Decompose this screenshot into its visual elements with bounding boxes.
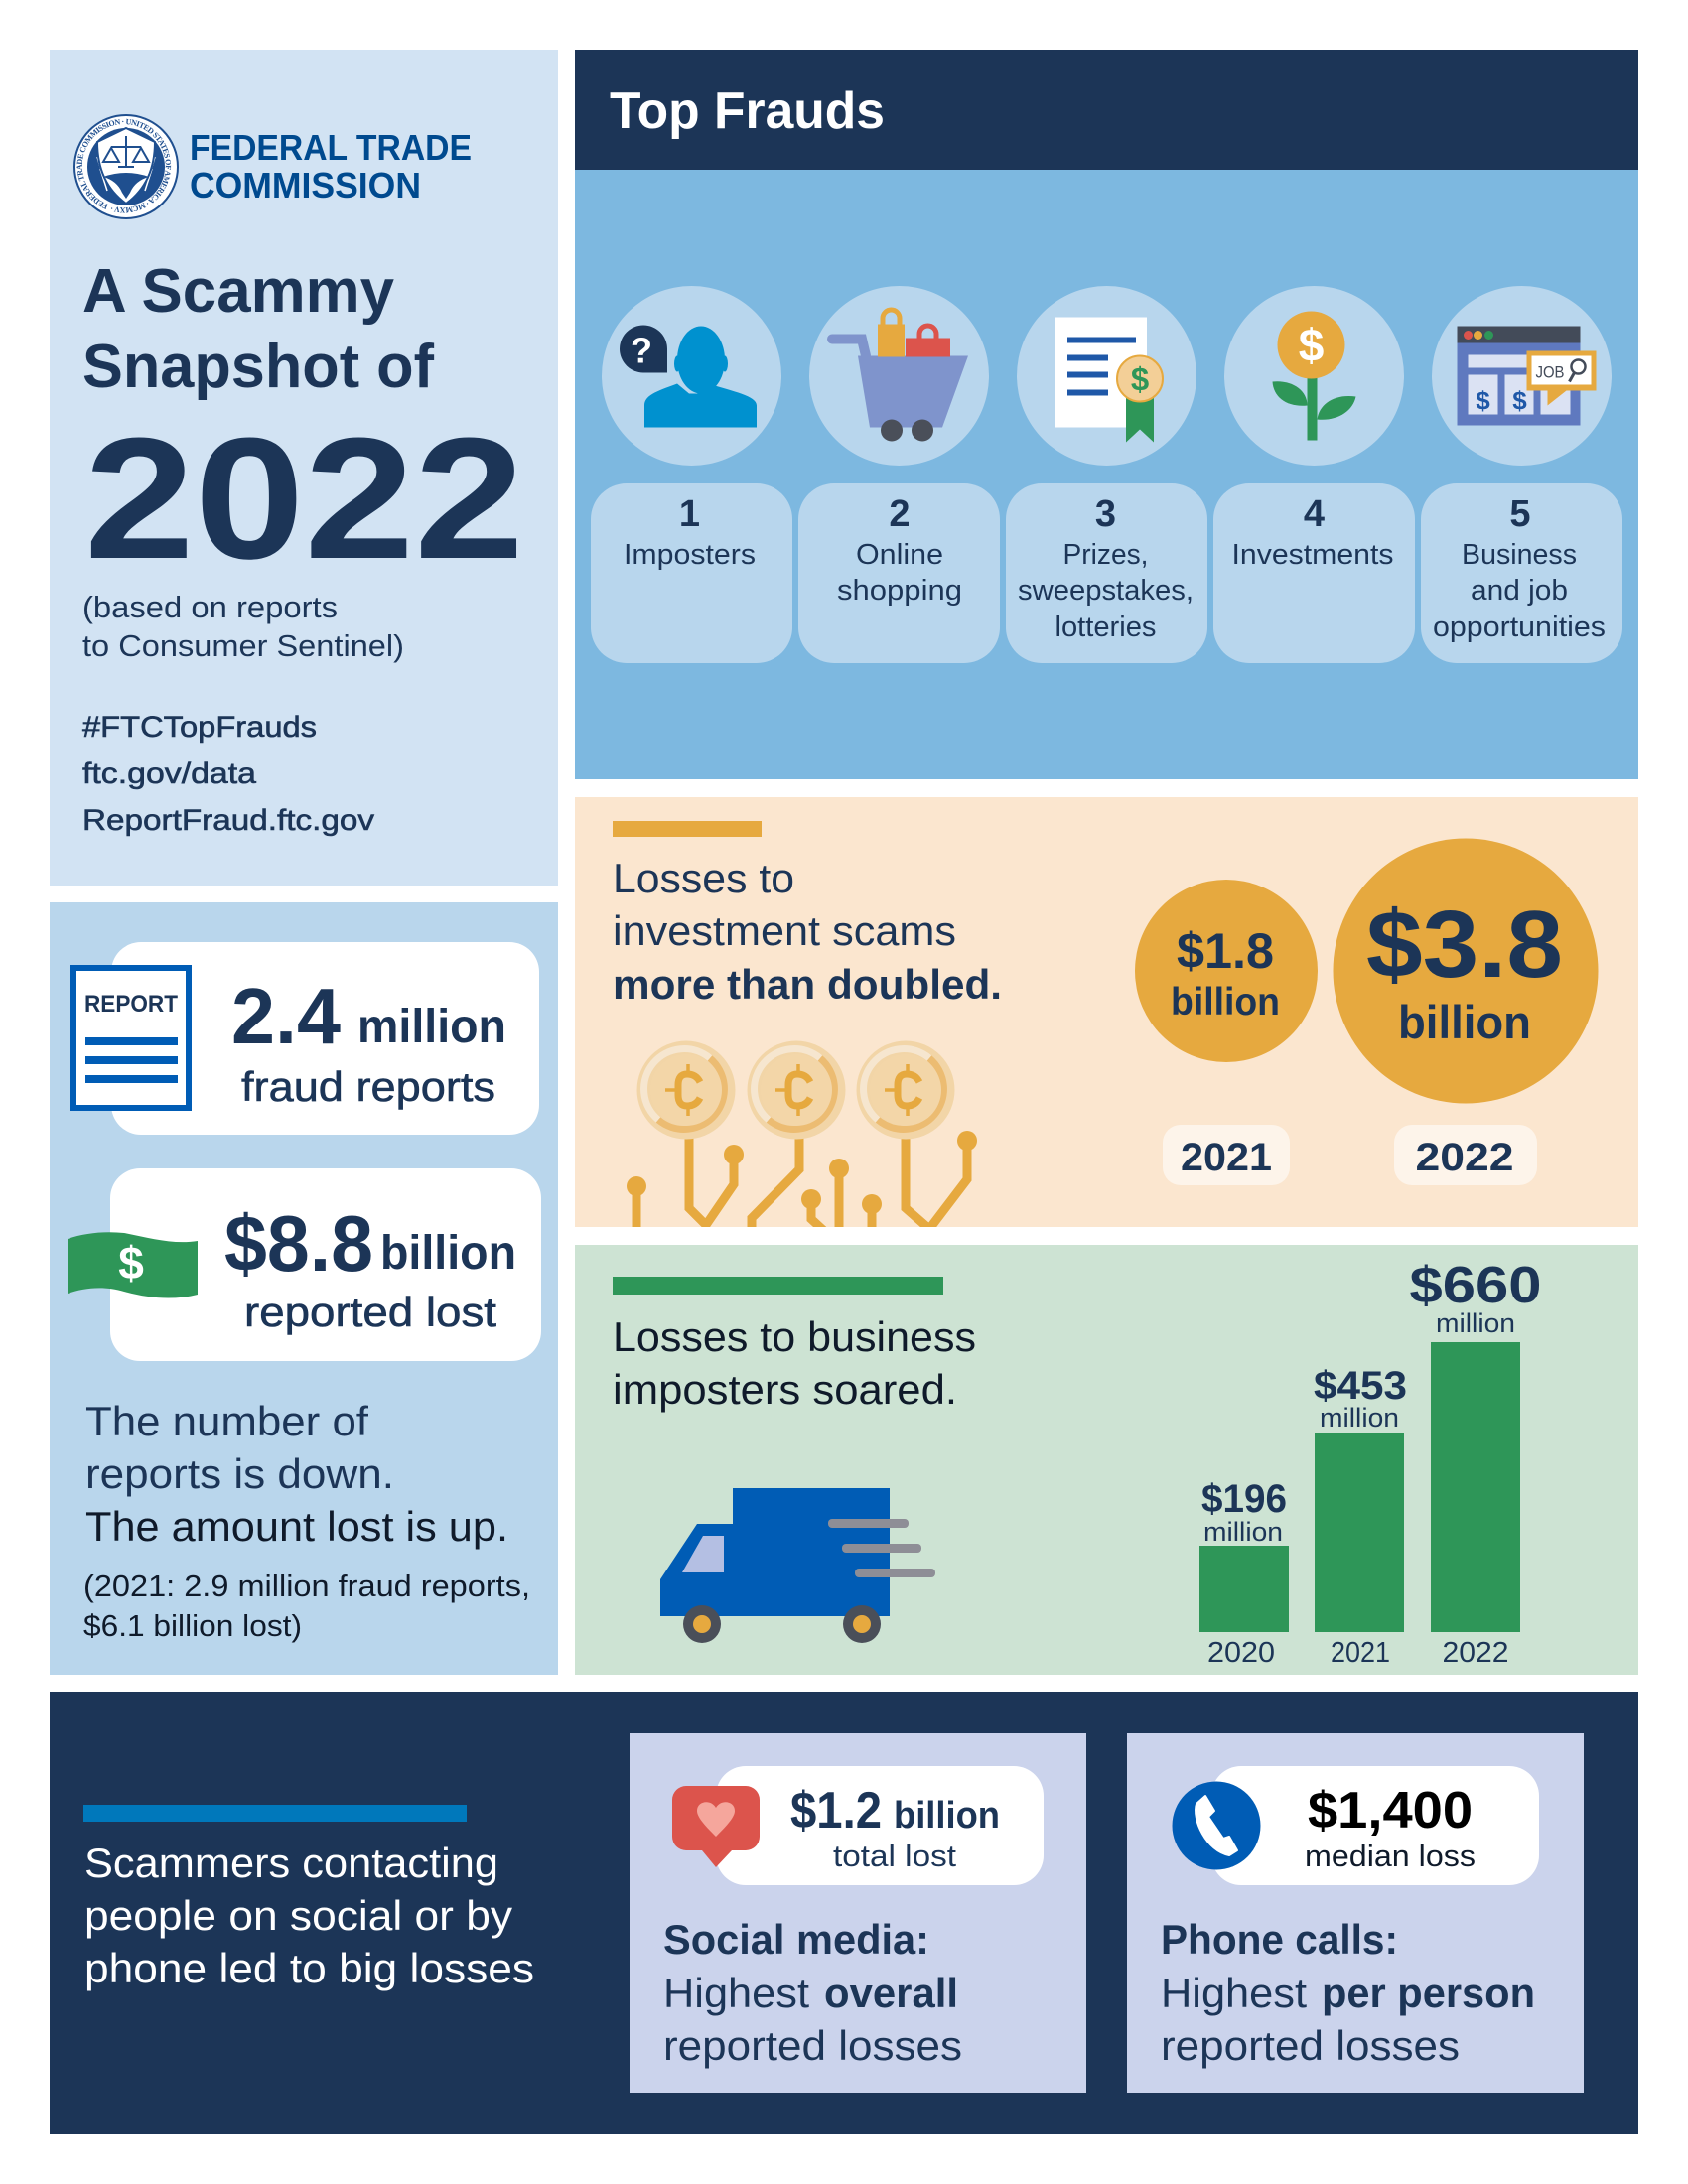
icon: prize certificate (1055, 318, 1163, 443)
bar: 2022: $660 (1410, 1257, 1541, 1314)
logo wordmark: COMMISSION (190, 165, 421, 205)
links: #FTCTopFrauds (82, 711, 317, 744)
fraud 3: prizes (1006, 286, 1207, 663)
fraud 2: online shopping: shopping (837, 575, 962, 607)
bar: 2022: 2022 (1442, 1637, 1509, 1669)
card: fraud reports (73, 942, 539, 1135)
text: phone calls: per person (1322, 1970, 1535, 2016)
text: losses to investment scams: investment scams (613, 907, 956, 954)
title: Snapshot of (82, 333, 434, 401)
chip: 2021 (1163, 1125, 1290, 1185)
bubble: 2021 losses: $1.8 (1177, 923, 1274, 979)
chip: 2022 (1394, 1125, 1537, 1185)
icon: job listing browser: JOB (1535, 363, 1565, 381)
chip: 2021: 2021 (1181, 1136, 1272, 1179)
text: reports down, amount up: The amount lost is up. (85, 1503, 508, 1550)
stat: 2.4 million: 2.4 (231, 972, 341, 1060)
panel: investment scams (575, 797, 1638, 1231)
links: ftc.gov/data (82, 757, 256, 790)
fraud 4: investments (1213, 286, 1415, 663)
stat: 1.2 billion (790, 1782, 1000, 1873)
subtitle: (based on reports (82, 590, 338, 624)
accent bar (613, 1277, 943, 1295)
logo wordmark (190, 127, 472, 205)
icon: money plant (1273, 312, 1356, 441)
text: social media: Social media: (663, 1916, 929, 1963)
fraud 2: online shopping (798, 286, 1000, 663)
card: phone calls (1127, 1733, 1584, 2093)
text: losses to investment scams (613, 855, 1002, 1008)
text: 2021 comparison: (2021: 2.9 million fraud reports, (83, 1569, 530, 1603)
icon: shopping cart (832, 310, 968, 441)
links (82, 711, 374, 837)
bar: 2021: million (1320, 1403, 1399, 1433)
label: fraud reports: fraud reports (241, 1063, 495, 1110)
text: phone calls: reported losses (1161, 2022, 1460, 2069)
bar: 2022 (1410, 1257, 1541, 1669)
fraud 5: business and job: and job (1471, 575, 1568, 607)
icon: job listing browser (1458, 326, 1597, 425)
icon: phone (1172, 1781, 1261, 1870)
icon: delivery truck (660, 1488, 935, 1643)
heading bar: Top Frauds (575, 50, 1638, 170)
fraud 3: prizes: Prizes, (1062, 539, 1148, 571)
bar chart: business imposter losses (1199, 1257, 1541, 1669)
stat: 1.2 billion: billion (894, 1795, 1000, 1837)
fraud 5: business and job: Business (1462, 539, 1577, 571)
bar: 2020: 2020 (1207, 1637, 1275, 1669)
fraud 3: prizes: lotteries (1055, 612, 1156, 643)
bubble: 2021 losses (1135, 880, 1318, 1062)
bubble: 2021 losses: billion (1171, 981, 1280, 1024)
text: phone calls: Highest (1161, 1970, 1307, 2016)
stat: 8.8 billion: billion (380, 1227, 516, 1280)
stat: 1,400 (1305, 1782, 1476, 1873)
heading bar: Top Frauds: Top Frauds (610, 82, 885, 140)
stat: 2.4 million (231, 972, 506, 1060)
stat: 8.8 billion: $8.8 (224, 1199, 373, 1288)
stat: 1,400: $1,400 (1308, 1782, 1473, 1840)
text: reports down, amount up: The number of (85, 1398, 368, 1444)
stat: 1.2 billion: total lost (833, 1839, 956, 1873)
text: social media: Highest (663, 1970, 809, 2016)
stat: 2.4 million: million (357, 1001, 506, 1053)
stat: 8.8 billion (224, 1199, 516, 1288)
accent bar (83, 1805, 467, 1822)
fraud 3: prizes: 3 (1095, 493, 1116, 535)
subtitle: to Consumer Sentinel) (82, 628, 404, 663)
text: losses to business imposters: imposters soared. (613, 1366, 957, 1413)
icon: job listing browser: $ (1512, 385, 1527, 415)
text: scammers contacting people: people on social or by (84, 1892, 512, 1939)
bubble: 2022 losses: billion (1398, 996, 1531, 1048)
bar: 2021: $453 (1314, 1364, 1407, 1408)
text: reports down, amount up: reports is down. (85, 1450, 394, 1497)
icon: dollar bill (68, 1232, 198, 1298)
icon: FTC seal: FEDERAL TRADE COMMISSION · UNITED STATES OF AMERICA · MCMXV · (77, 119, 171, 212)
fraud 5: business and job: opportunities (1433, 612, 1606, 643)
text: social media: overall (824, 1970, 958, 2016)
accent bar (613, 821, 762, 837)
chip: 2022: 2022 (1416, 1136, 1513, 1179)
text: scammers contacting people: phone led to big losses (84, 1945, 534, 1991)
logo wordmark: FEDERAL TRADE (190, 127, 472, 168)
icon: job listing browser: $ (1476, 385, 1490, 415)
fraud 2: online shopping: 2 (889, 493, 911, 535)
panel: report statistics (50, 902, 558, 1675)
bar: 2020: million (1203, 1517, 1283, 1547)
bar: 2021 (1314, 1364, 1407, 1669)
card: social media (630, 1733, 1086, 2093)
label: reported lost: reported lost (244, 1289, 496, 1335)
bubble: 2022 losses: $3.8 (1366, 891, 1563, 998)
text: 2021 comparison (83, 1569, 530, 1643)
icon: dollar bill: $ (118, 1237, 144, 1289)
text: losses to business imposters (613, 1313, 976, 1413)
text: scammers contacting people: Scammers contacting (84, 1840, 498, 1886)
fraud 1: imposters: Imposters (624, 539, 756, 571)
fraud 4: investments: 4 (1304, 493, 1325, 535)
text: phone calls: Phone calls: (1161, 1916, 1398, 1963)
text: scammers contacting people (84, 1840, 534, 1991)
panel: title and FTC branding (50, 50, 558, 886)
icon: report document (73, 968, 189, 1108)
icon: prize certificate: $ (1131, 361, 1149, 397)
icon: money plant: $ (1299, 320, 1324, 371)
text: social media: reported losses (663, 2022, 962, 2069)
title: A Scammy (82, 257, 395, 326)
card: reported lost (68, 1168, 541, 1361)
stat: 1,400: median loss (1305, 1839, 1476, 1873)
panel: social and phone losses (50, 1692, 1638, 2134)
fraud 3: prizes: sweepstakes, (1018, 575, 1194, 607)
text: losses to business imposters: Losses to business (613, 1313, 976, 1360)
fraud 1: imposters: 1 (679, 493, 700, 535)
text: losses to investment scams: more than doubled. (613, 961, 1002, 1008)
fraud 2: online shopping: Online (856, 539, 943, 571)
bar: 2022: million (1436, 1308, 1515, 1338)
bar: 2020: $196 (1201, 1477, 1287, 1521)
fraud 4: investments: Investments (1231, 539, 1394, 571)
year heading: 2022 (84, 401, 524, 595)
illustration: crypto coins on circuit traces (627, 1040, 977, 1231)
panel: business imposters (575, 1245, 1638, 1675)
subtitle (82, 590, 404, 663)
bar: 2021: 2021 (1331, 1637, 1390, 1669)
links: ReportFraud.ftc.gov (82, 804, 374, 837)
bubble: 2022 losses (1333, 838, 1599, 1104)
fraud 5: business and job: 5 (1509, 493, 1531, 535)
icon: imposter (620, 326, 757, 427)
fraud 5: business and job (1421, 286, 1622, 663)
text: social media (663, 1916, 962, 2069)
icon: imposter: ? (631, 330, 652, 371)
panel: top frauds (575, 50, 1638, 779)
text: reports down, amount up (85, 1398, 508, 1550)
title (82, 257, 434, 401)
text: 2021 comparison: $6.1 billion lost) (83, 1608, 302, 1643)
icon: heart notification (672, 1786, 760, 1867)
text: phone calls (1161, 1916, 1535, 2069)
icon: report document: REPORT (84, 991, 178, 1018)
fraud 1: imposters (591, 286, 792, 663)
bar: 2020 (1199, 1477, 1289, 1669)
stat: 1.2 billion: $1.2 (790, 1782, 882, 1840)
text: losses to investment scams: Losses to (613, 855, 794, 901)
